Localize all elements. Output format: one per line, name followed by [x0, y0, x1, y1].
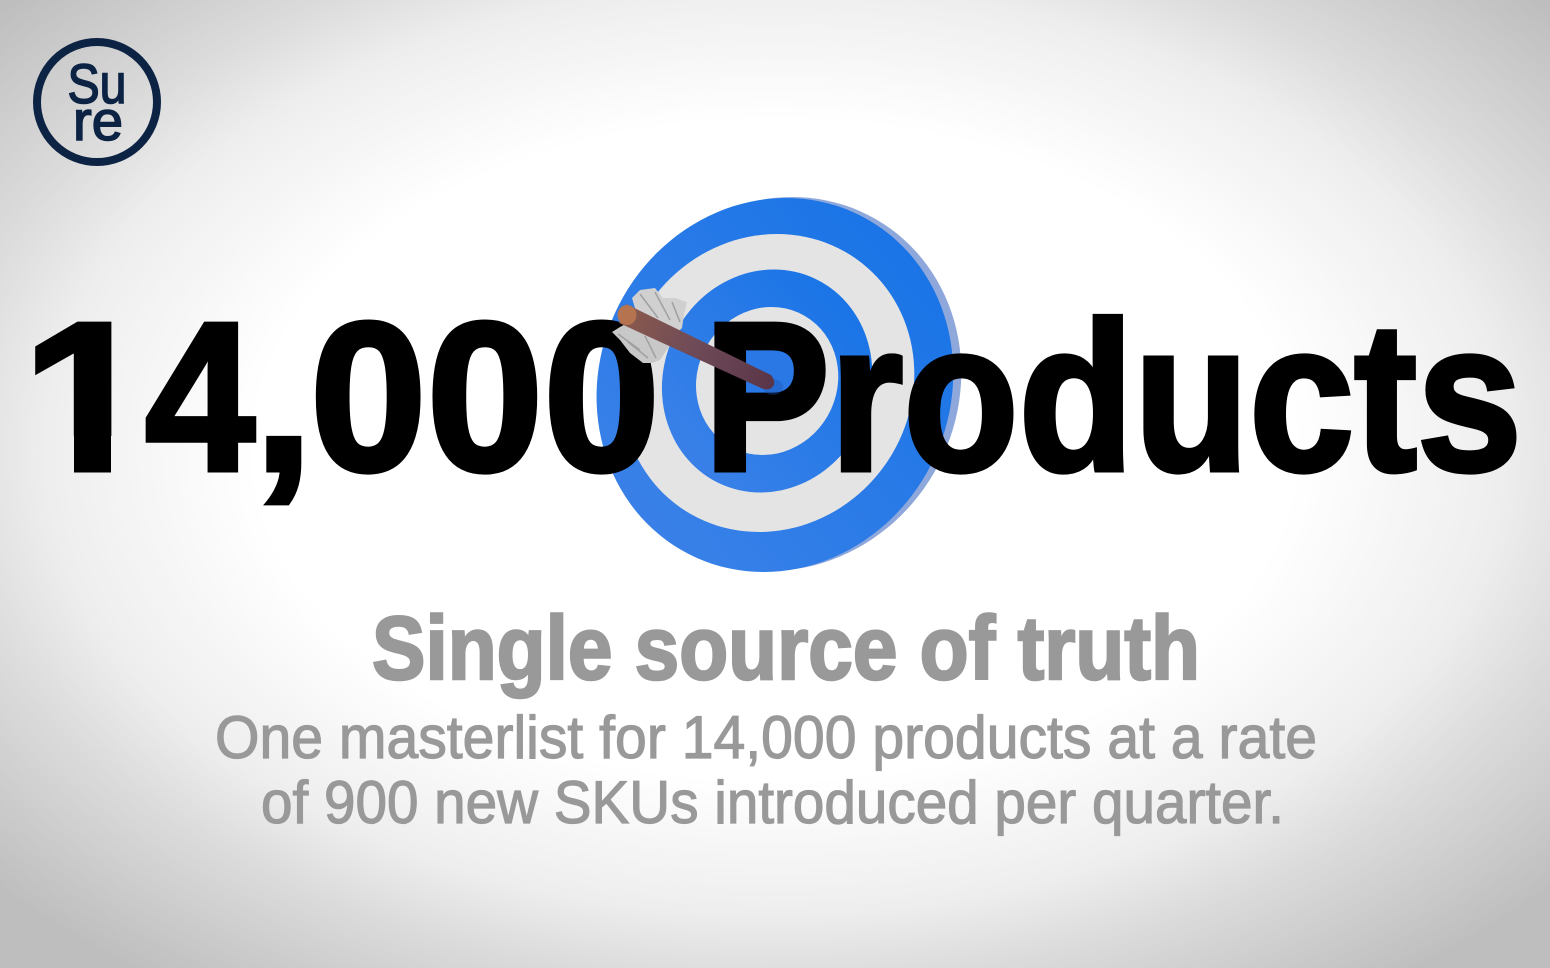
logo: Sure roundel — [37, 42, 157, 162]
body text — [215, 704, 1317, 836]
logo: Sure roundel: Su — [68, 52, 126, 115]
icon: arrow in front of headline — [612, 288, 783, 395]
target inner white ring — [692, 307, 843, 455]
arrow shaft — [619, 304, 774, 389]
target white ring — [613, 234, 923, 532]
target inner blue ring — [655, 270, 879, 492]
arrow nock — [618, 305, 636, 325]
icon: bullseye target — [586, 197, 972, 572]
target outer blue ring — [586, 198, 964, 572]
headline: 000 — [310, 278, 660, 515]
headline: , — [254, 278, 313, 515]
headline — [20, 278, 1522, 515]
body text: One masterlist for 14,000 products at a rate — [215, 704, 1317, 771]
subheading: Single source of truth — [372, 599, 1200, 699]
arrow tip shadow — [763, 379, 783, 395]
arrow fletching — [612, 288, 687, 363]
body text: of 900 new SKUs introduced per quarter. — [261, 769, 1284, 836]
headline: 1 — [22, 278, 152, 515]
headline: 4 — [145, 278, 255, 515]
target edge shadow — [590, 197, 972, 571]
logo: Sure roundel: re — [73, 89, 123, 152]
target centre blue — [728, 338, 817, 418]
